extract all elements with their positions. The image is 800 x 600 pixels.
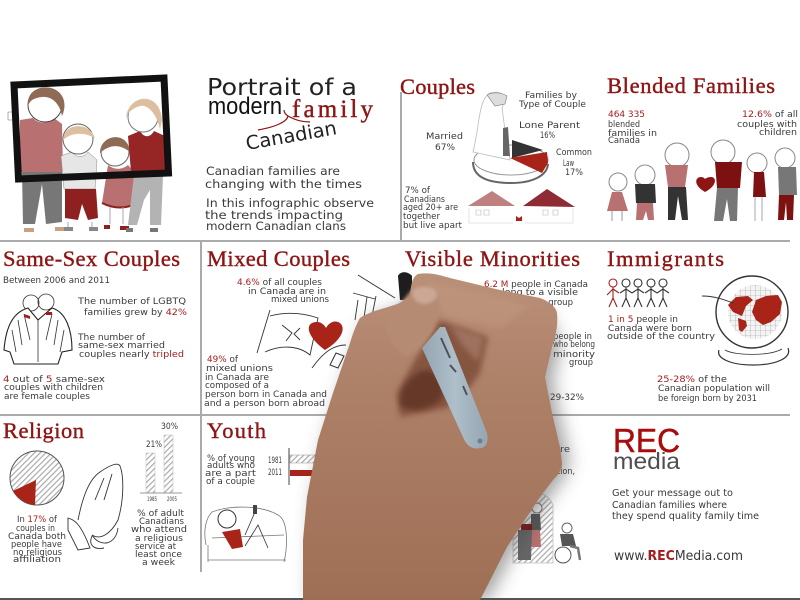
label: common law: 17% xyxy=(565,168,583,178)
chart title: Families by xyxy=(525,91,578,101)
stat: 4.6% mixed unions: 4.6% of all couples xyxy=(237,278,322,288)
panel: couples xyxy=(400,74,592,231)
website: www.RECMedia.com xyxy=(614,549,743,564)
intro text: In this infographic observe xyxy=(206,196,374,210)
text: adult religious attendance xyxy=(131,509,187,568)
heading: Immigrants: Immigrants xyxy=(607,246,724,271)
stat: 49% of mixed unions: and a person born abroad xyxy=(204,399,325,409)
title line: modern: modern xyxy=(208,93,282,120)
heading: Blended Families: Blended Families xyxy=(607,73,775,98)
stat: share of people in minority group: who belong xyxy=(553,340,595,350)
text: 17% of couples: Canada both xyxy=(8,532,66,542)
text: adult religious attendance: a week xyxy=(142,558,176,568)
illustration: young adult on couch xyxy=(205,505,286,562)
call to action: Canadian families where xyxy=(612,500,727,511)
text: 17% of couples: couples in xyxy=(16,524,55,534)
intro text: the trends impacting xyxy=(205,208,343,222)
logo: REC media: media xyxy=(613,448,680,474)
icon: globe in snow dome xyxy=(702,276,789,365)
illustration: blended family group xyxy=(607,140,797,221)
stat: 1 in 5 born outside: Canada were born xyxy=(608,324,692,334)
stat: share of couples with children xyxy=(737,110,798,138)
stat: share of people in minority group: minority xyxy=(553,350,596,360)
stat: married couples tripled: couples nearly tripled xyxy=(79,350,184,360)
stat: 29-32% projection: 29-32% xyxy=(550,393,584,403)
icon: praying hands xyxy=(68,464,123,550)
stat: 49% of mixed unions: 49% of xyxy=(207,355,239,365)
stat: female couples with children: 4 out of 5 same-sex xyxy=(3,375,106,385)
icon: bride and groom on pie chart xyxy=(473,92,548,183)
living apart text xyxy=(403,186,462,231)
stat: 1 in 5 born outside xyxy=(607,315,716,342)
stat: blended families count xyxy=(608,110,657,146)
stat: LGBTQ families xyxy=(77,297,187,318)
stat: 4.6% mixed unions: mixed unions xyxy=(271,295,329,305)
label: married xyxy=(426,132,463,153)
heading: Couples: Couples xyxy=(400,74,475,99)
stat: share of couples with children: children xyxy=(759,128,797,138)
label: lone parent: 16% xyxy=(540,131,555,141)
bar chart: weekly service attendance: 1985 xyxy=(147,496,157,503)
chart title xyxy=(518,91,586,110)
text: 17% of couples: no religious xyxy=(13,548,62,558)
call to action: Get your message out to xyxy=(612,488,733,499)
heading: Youth: Youth xyxy=(207,418,266,443)
upper knuckle highlight xyxy=(425,282,530,328)
main title xyxy=(207,75,374,155)
stat: foreign born projection: 25-28% of the xyxy=(657,375,728,385)
icon: two men in suits xyxy=(4,294,72,364)
bar chart: young adults in couples: 1981 xyxy=(268,456,282,466)
living apart text: together xyxy=(403,212,440,222)
living apart text: Canadians xyxy=(404,195,445,205)
marker cap behind fingers xyxy=(398,272,412,300)
text: adult religious attendance: least once xyxy=(135,550,182,560)
dark cavity between fingers xyxy=(397,320,488,417)
text: adult religious attendance: service at xyxy=(135,542,176,552)
panel: REC Media xyxy=(612,422,759,564)
panel: family portrait illustration xyxy=(8,78,168,230)
black picture frame xyxy=(14,78,168,179)
panel: youth xyxy=(205,418,580,563)
stat: 6.2 M people: 6.2 M people in Canada xyxy=(484,280,588,290)
icon: flags with heart xyxy=(257,275,395,368)
stat: 49% of mixed unions: person born in Canada and xyxy=(205,390,327,400)
youth text fragments: who are xyxy=(530,445,570,455)
text: 17% of couples xyxy=(8,515,66,565)
label: lone parent: Lone Parent xyxy=(519,121,581,131)
bar chart: young adults in couples xyxy=(268,448,318,485)
woman figure xyxy=(126,99,165,230)
title word: Canadian: Canadian xyxy=(244,117,338,155)
stat: blended families count: 464 335 xyxy=(608,110,645,120)
label: lone parent xyxy=(519,121,581,141)
label: married: Married xyxy=(426,132,463,142)
stat: share of people in minority group xyxy=(553,332,596,368)
text: young adults: are a part xyxy=(205,469,257,479)
text: young adults: adults who xyxy=(207,461,255,471)
bar chart: weekly service attendance: 2005 xyxy=(167,496,177,503)
living apart text: aged 20+ are xyxy=(403,203,458,213)
stat: share of people in minority group: group xyxy=(569,358,593,368)
stat: share of couples with children: 12.6% of all xyxy=(742,110,798,120)
stat: blended families count: families in xyxy=(608,129,657,139)
man figure xyxy=(8,87,65,230)
youth text fragments: population, xyxy=(530,467,575,477)
stat: married couples tripled: The number of xyxy=(77,333,146,343)
stat: married couples tripled: same-sex married xyxy=(78,341,165,351)
text: young adults: % of young xyxy=(207,454,255,464)
icon: five stick figures xyxy=(607,279,669,307)
curly brace xyxy=(258,110,310,130)
stat: 1 in 5 born outside: outside of the country xyxy=(607,332,716,342)
panel: visible minorities xyxy=(405,246,596,403)
heading: Mixed Couples: Mixed Couples xyxy=(207,246,350,271)
living apart text: but live apart xyxy=(403,221,462,231)
stat: foreign born projection xyxy=(657,375,770,404)
panel: religion xyxy=(3,418,187,568)
pie chart: no religious affiliation xyxy=(10,451,64,505)
stat: 49% of mixed unions: composed of a xyxy=(205,381,269,391)
text: adult religious attendance: % of adult xyxy=(137,509,184,519)
stat: female couples with children: couples with children xyxy=(4,383,103,393)
stat: share of people in minority group: people in xyxy=(553,332,592,342)
stat: 1 in 5 born outside: 1 in 5 people in xyxy=(608,315,678,325)
chart title: Type of Couple xyxy=(518,100,586,110)
illustration: elderly family xyxy=(513,492,580,563)
subheading: period: Between 2006 and 2011 xyxy=(3,276,110,286)
text: adult religious attendance: a religious xyxy=(135,534,183,544)
label: common law xyxy=(556,148,592,178)
logo: REC media xyxy=(613,422,680,474)
bar chart: weekly service attendance: 21% xyxy=(146,440,162,450)
panel: blended families xyxy=(607,73,798,221)
youth text fragments xyxy=(530,445,575,477)
stat: LGBTQ families: families grew by 42% xyxy=(84,308,187,318)
title line: Portrait of a: Portrait of a xyxy=(207,75,357,101)
label: married: 67% xyxy=(435,143,455,153)
stat: foreign born projection: Canadian population will xyxy=(658,384,770,394)
thumb over marker xyxy=(385,286,439,357)
panel: mixed couples xyxy=(204,246,395,409)
stat: share of couples with children: couples with xyxy=(737,120,797,130)
call to action: they spend quality family time xyxy=(612,511,759,522)
stat: 6.2 M people: minority group xyxy=(510,298,573,308)
stat: 6.2 M people xyxy=(484,280,588,308)
intro text: changing with the times xyxy=(205,177,362,191)
heading: Same-Sex Couples: Same-Sex Couples xyxy=(3,246,180,271)
thumbnail xyxy=(412,287,437,304)
hand holding marker xyxy=(303,272,569,600)
label: common law: Common xyxy=(556,148,592,158)
heading: Visible Minorities: Visible Minorities xyxy=(405,246,580,271)
text: adult religious attendance: Canadians xyxy=(139,517,184,527)
text: 17% of couples: people have xyxy=(11,540,62,550)
stat: 6.2 M people: belong to a visible xyxy=(490,288,578,298)
marker pen xyxy=(422,327,488,448)
bar chart: weekly service attendance xyxy=(140,422,182,503)
bar chart: weekly service attendance: 30% xyxy=(161,422,178,432)
boy figure xyxy=(61,124,98,229)
hand silhouette xyxy=(303,273,562,600)
stat: 49% of mixed unions: in Canada are xyxy=(205,373,269,383)
stat: 4.6% mixed unions: in Canada are in xyxy=(248,287,326,297)
intro text xyxy=(205,164,374,233)
text: young adults xyxy=(205,454,257,487)
logo: REC media: REC xyxy=(613,422,680,459)
text: young adults: of a couple xyxy=(206,477,255,487)
stat: blended families count: blended xyxy=(608,120,640,130)
living apart text: 7% of xyxy=(405,186,431,196)
stat: married couples tripled xyxy=(77,333,184,360)
label: common law: Law xyxy=(563,159,574,169)
intro text: Canadian families are xyxy=(206,164,340,178)
girl figure xyxy=(100,137,138,228)
title word: family: family xyxy=(292,96,374,123)
panel: same-sex couples xyxy=(3,246,187,402)
call to action xyxy=(612,488,759,522)
intro text: modern Canadian clans xyxy=(206,219,346,233)
icon: two houses xyxy=(468,189,575,223)
stat: blended families count: Canada xyxy=(608,136,640,146)
text: adult religious attendance: who attend xyxy=(131,525,187,535)
stat: 49% of mixed unions: mixed unions xyxy=(206,364,273,374)
text: 17% of couples: affiliation xyxy=(13,555,61,565)
stat: female couples with children xyxy=(3,375,106,402)
heading: Religion: Religion xyxy=(3,418,84,443)
stat: 4.6% mixed unions xyxy=(237,278,329,305)
text: 17% of couples: In 17% of xyxy=(17,515,58,525)
stat: LGBTQ families: The number of LGBTQ xyxy=(77,297,186,307)
panel: immigrants xyxy=(607,246,789,404)
stat: foreign born projection: be foreign born by 2031 xyxy=(658,394,757,404)
stat: 49% of mixed unions xyxy=(204,355,327,409)
stat: female couples with children: are female couples xyxy=(4,392,90,402)
bar chart: young adults in couples: 2011 xyxy=(268,468,282,478)
